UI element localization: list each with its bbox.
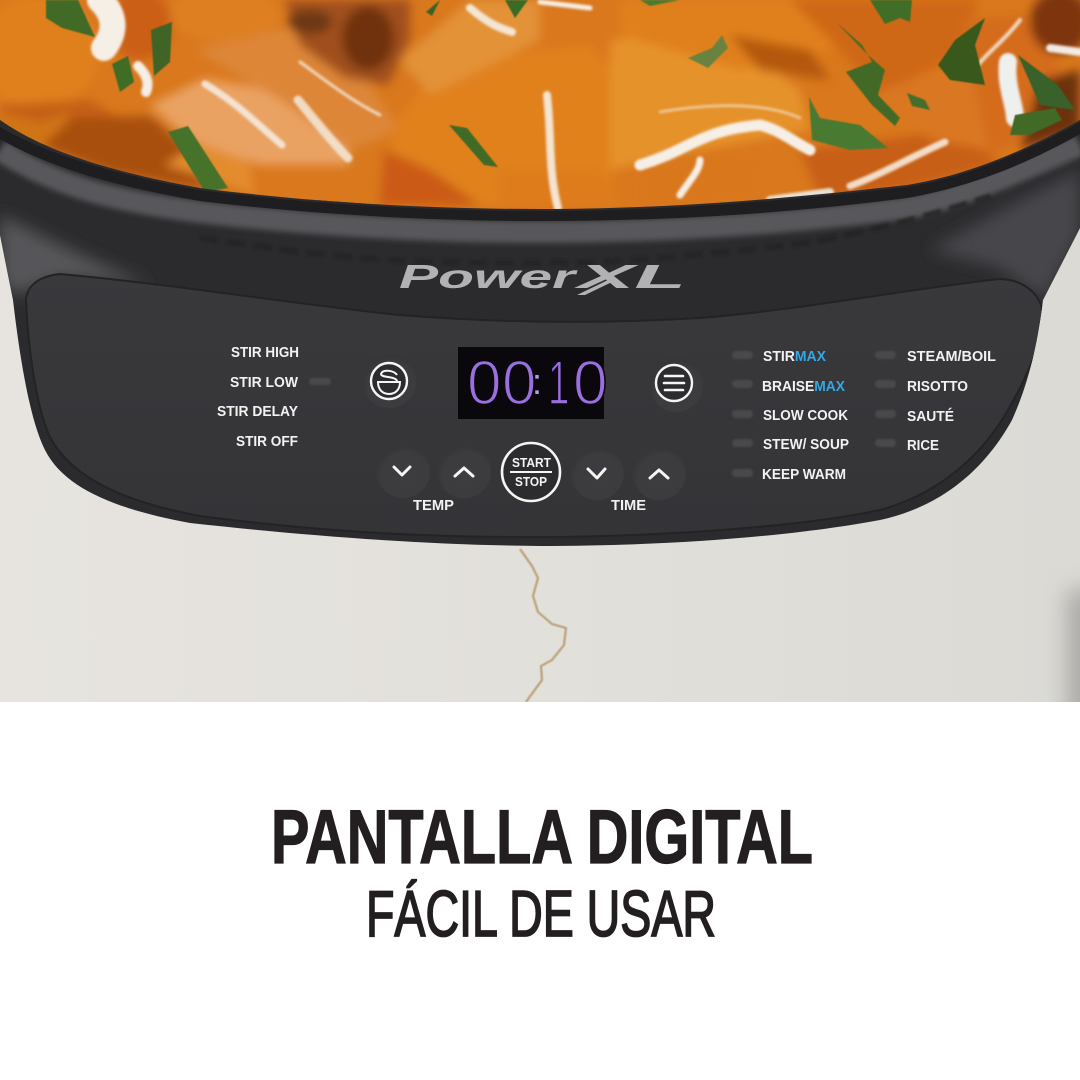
button: menu bbox=[649, 358, 703, 412]
display: timer: : bbox=[532, 361, 542, 402]
labels: stir modes: STIR LOW bbox=[230, 375, 298, 391]
labels: stir modes: STIR HIGH bbox=[231, 345, 299, 361]
labels: cooking programs column 1: STEW/ SOUP bbox=[763, 437, 849, 453]
labels: cooking programs column 1 bbox=[762, 349, 849, 483]
labels: cooking programs column 2: RISOTTO bbox=[907, 379, 968, 395]
food: cream drizzle bbox=[100, 0, 1080, 208]
white caption area bbox=[0, 702, 1080, 1080]
food: sauce and chicken pieces bbox=[0, 0, 1080, 208]
body: dark rim bbox=[0, 122, 1080, 221]
button: start stop: STOP bbox=[515, 474, 547, 489]
display: timer bbox=[458, 347, 607, 419]
marble vein bbox=[520, 549, 566, 702]
logo: PowerXL bbox=[399, 258, 686, 295]
body: dark gasket piece bbox=[308, 199, 367, 204]
logo: PowerXL: XL bbox=[573, 258, 686, 295]
button: start stop: START bbox=[512, 455, 551, 470]
display: timer: 0 bbox=[573, 349, 607, 418]
button: start stop bbox=[502, 443, 560, 501]
button: stir bbox=[362, 354, 416, 408]
button: temp up bbox=[437, 444, 491, 498]
display: timer: 0 bbox=[502, 349, 536, 418]
button: temp down bbox=[376, 444, 430, 498]
display: timer: 1 bbox=[548, 348, 569, 417]
labels: cooking programs column 1: SLOW COOK bbox=[763, 408, 848, 424]
labels: cooking programs column 2 bbox=[907, 349, 996, 454]
labels: cooking programs column 1: STIRMAX bbox=[763, 349, 826, 365]
title: PANTALLA DIGITAL bbox=[271, 795, 813, 880]
display: timer: 0 bbox=[467, 349, 501, 418]
labels: stir modes: STIR OFF bbox=[236, 434, 298, 450]
labels: cooking programs column 1: KEEP WARM bbox=[762, 467, 846, 483]
label: temp: TEMP bbox=[413, 497, 454, 514]
air fryer body bbox=[0, 120, 1080, 546]
logo: PowerXL: Power bbox=[399, 258, 579, 295]
button: time up bbox=[632, 446, 686, 500]
labels: cooking programs column 2: SAUTÉ bbox=[907, 408, 954, 425]
labels: stir modes bbox=[217, 345, 299, 450]
body: grey rim highlight bbox=[0, 145, 1080, 232]
labels: stir modes: STIR DELAY bbox=[217, 404, 298, 420]
food: butter chicken curry bbox=[0, 0, 1080, 215]
indicator: stir low LED bbox=[309, 378, 331, 385]
food: cilantro leaves bbox=[46, 0, 1075, 192]
button: time down bbox=[570, 446, 624, 500]
label: time: TIME bbox=[611, 497, 646, 514]
indicators: program LEDs bbox=[732, 351, 896, 477]
control panel plate bbox=[26, 274, 1043, 537]
labels: cooking programs column 1: BRAISEMAX bbox=[762, 379, 845, 395]
labels: cooking programs column 2: STEAM/BOIL bbox=[907, 349, 996, 365]
subtitle: FÁCIL DE USAR bbox=[366, 877, 716, 950]
labels: cooking programs column 2: RICE bbox=[907, 438, 939, 454]
background: marble countertop bbox=[0, 228, 1080, 702]
